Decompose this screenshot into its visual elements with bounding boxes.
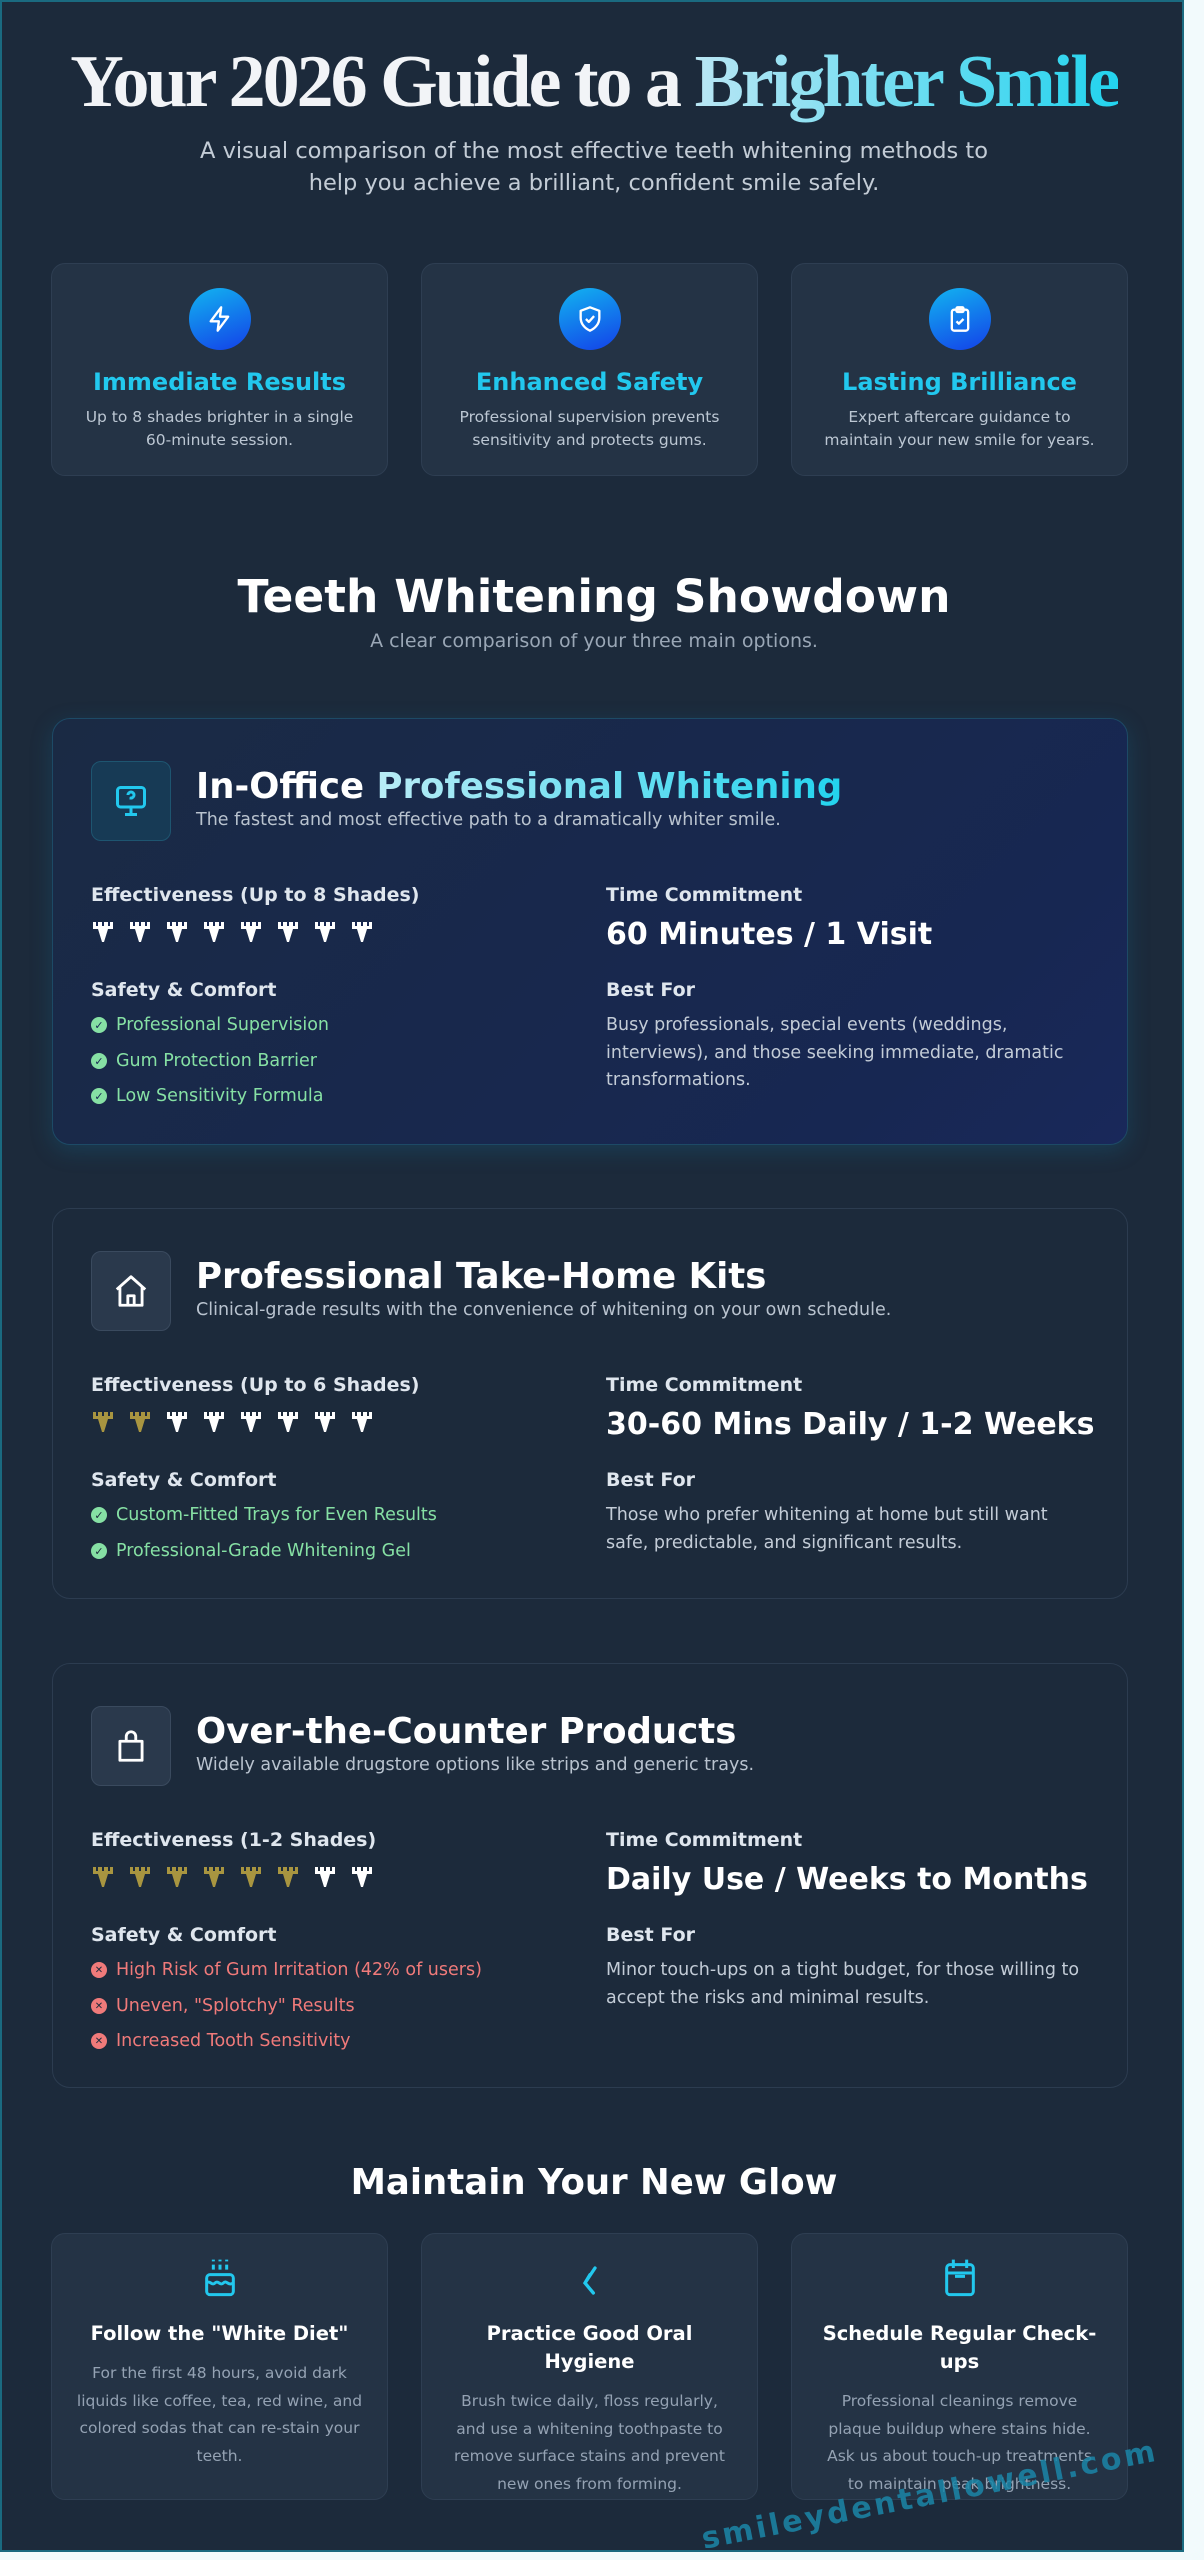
card: in-office [52,718,1128,1145]
card: over-the-counter: Over-the-Counter Products [196,1711,736,1752]
teeth rating [93,1867,372,1887]
list: safety items: Custom-Fitted Trays for Even Results [116,1505,437,1525]
card: in-office: The fastest and most effective path to a dramatically whiter smile. [196,810,781,830]
feature card: enhanced safety: Professional supervision prevents sensitivity and protects gums. [460,408,719,449]
icon: bag [91,1706,171,1786]
list: safety items: ✓ [94,1018,104,1032]
card: over-the-counter [52,1663,1128,2088]
feature card: enhanced safety [421,263,758,476]
card: take-home kits: Clinical-grade results with the convenience of whitening on your own schedule. [196,1300,891,1320]
card: over-the-counter: Widely available drugstore options like strips and generic trays. [196,1755,754,1775]
card: in-office: 60 Minutes / 1 Visit [606,917,932,952]
card: take-home kits: ✓ [94,1544,104,1558]
feature card: lasting brilliance: Expert aftercare guidance to maintain your new smile for years. [824,408,1095,449]
feature card: lasting brilliance: Lasting Brilliance [842,368,1077,396]
title: Your 2026 Guide to a Brighter Smile [70,41,1118,123]
feature card: immediate results: Up to 8 shades brighter in a single 60-minute session. [86,408,353,449]
card: over-the-counter: Best For [606,1924,695,1946]
card: over-the-counter: Daily Use / Weeks to Months [606,1862,1088,1897]
card: in-office: Low Sensitivity Formula [116,1086,323,1106]
feature card: immediate results [51,263,388,476]
card: over-the-counter: Increased Tooth Sensitivity [116,2031,350,2051]
maintain card: oral hygiene: Brush twice daily, floss regularly, and use a whitening toothpaste to remove surface stains and prevent new ones from forming. [454,2392,725,2492]
card: in-office: Busy professionals, special events (weddings, interviews), and those seeking immediate, dramatic transformations. [606,1015,1063,1090]
card: take-home kits: Time Commitment [606,1374,802,1396]
maintain card: white diet [51,2233,388,2500]
teeth rating 8/8 [93,922,372,942]
teeth rating [93,1412,372,1432]
card: over-the-counter: ✕ [95,2036,103,2046]
icon: shield [559,288,621,350]
maintain card: white diet: Follow the "White Diet" [91,2322,348,2345]
card: in-office: Time Commitment [606,884,802,906]
feature card: immediate results: Immediate Results [93,368,346,396]
section heading: maintain: Maintain Your New Glow [351,2162,837,2203]
card: in-office: ✓ [94,1090,104,1102]
icon: floss [583,2266,597,2295]
card: take-home kits: Professional Take-Home Kits [196,1256,766,1297]
icon: lightning [189,288,251,350]
section heading: showdown: Teeth Whitening Showdown [238,570,950,623]
feature card: enhanced safety: Enhanced Safety [476,368,703,396]
maintain card: oral hygiene: Practice Good Oral Hygiene [487,2322,692,2373]
list: safety items: Professional Supervision [116,1015,329,1035]
card: over-the-counter: Effectiveness (1-2 Shades) [91,1829,376,1851]
icon: monitor tooth [91,761,171,841]
card: take-home kits: Best For [606,1469,695,1491]
list: safety items: ✓ [94,1508,104,1522]
maintain card: white diet: For the first 48 hours, avoid dark liquids like coffee, tea, red wine, and colored sodas that can re-stain your teeth. [77,2364,362,2464]
card: take-home kits: Effectiveness (Up to 6 Shades) [91,1374,419,1396]
card: over-the-counter: Time Commitment [606,1829,802,1851]
subtitle: A visual comparison of the most effective teeth whitening methods to help you achieve a brilliant, confident smile safely. [200,138,988,196]
icon: cake [205,2260,235,2296]
card: take-home kits: Professional-Grade Whitening Gel [116,1541,411,1561]
maintain card: check-ups: Schedule Regular Check-ups [823,2322,1096,2373]
card: in-office: Gum Protection Barrier [116,1051,317,1071]
card: in-office: ✓ [94,1054,104,1068]
card: take-home kits: Safety & Comfort [91,1469,276,1491]
maintain card: check-ups: Professional cleanings remove plaque buildup where stains hide. Ask us about touch-up treatments to maintain peak brightness. [827,2392,1092,2492]
card: take-home kits: 30-60 Mins Daily / 1-2 Weeks [606,1407,1094,1442]
card: in-office: Safety & Comfort [91,979,276,1001]
card: over-the-counter: Uneven, "Splotchy" Results [116,1996,355,2016]
icon: house [91,1251,171,1331]
card: in-office: In-Office Professional Whitening [196,766,842,807]
card: take-home kits [52,1208,1128,1599]
card: over-the-counter: Safety & Comfort [91,1924,276,1946]
card: over-the-counter: ✕ [95,2000,103,2012]
icon: calendar [945,2260,975,2296]
card: over-the-counter: Minor touch-ups on a tight budget, for those willing to accept the risks and minimal results. [606,1960,1079,2008]
feature card: lasting brilliance [791,263,1128,476]
icon: clipboard [929,288,991,350]
section subheading: A clear comparison of your three main options. [370,630,818,652]
list: risk items: ✕ [95,1964,103,1976]
list: risk items: High Risk of Gum Irritation (42% of users) [116,1960,482,1980]
card: take-home kits: Those who prefer whitening at home but still want safe, predictable, and significant results. [606,1505,1048,1552]
maintain card: oral hygiene [421,2233,758,2500]
card: in-office: Effectiveness (Up to 8 Shades) [91,884,419,906]
maintain card: check-ups [791,2233,1128,2500]
card: in-office: Best For [606,979,695,1001]
